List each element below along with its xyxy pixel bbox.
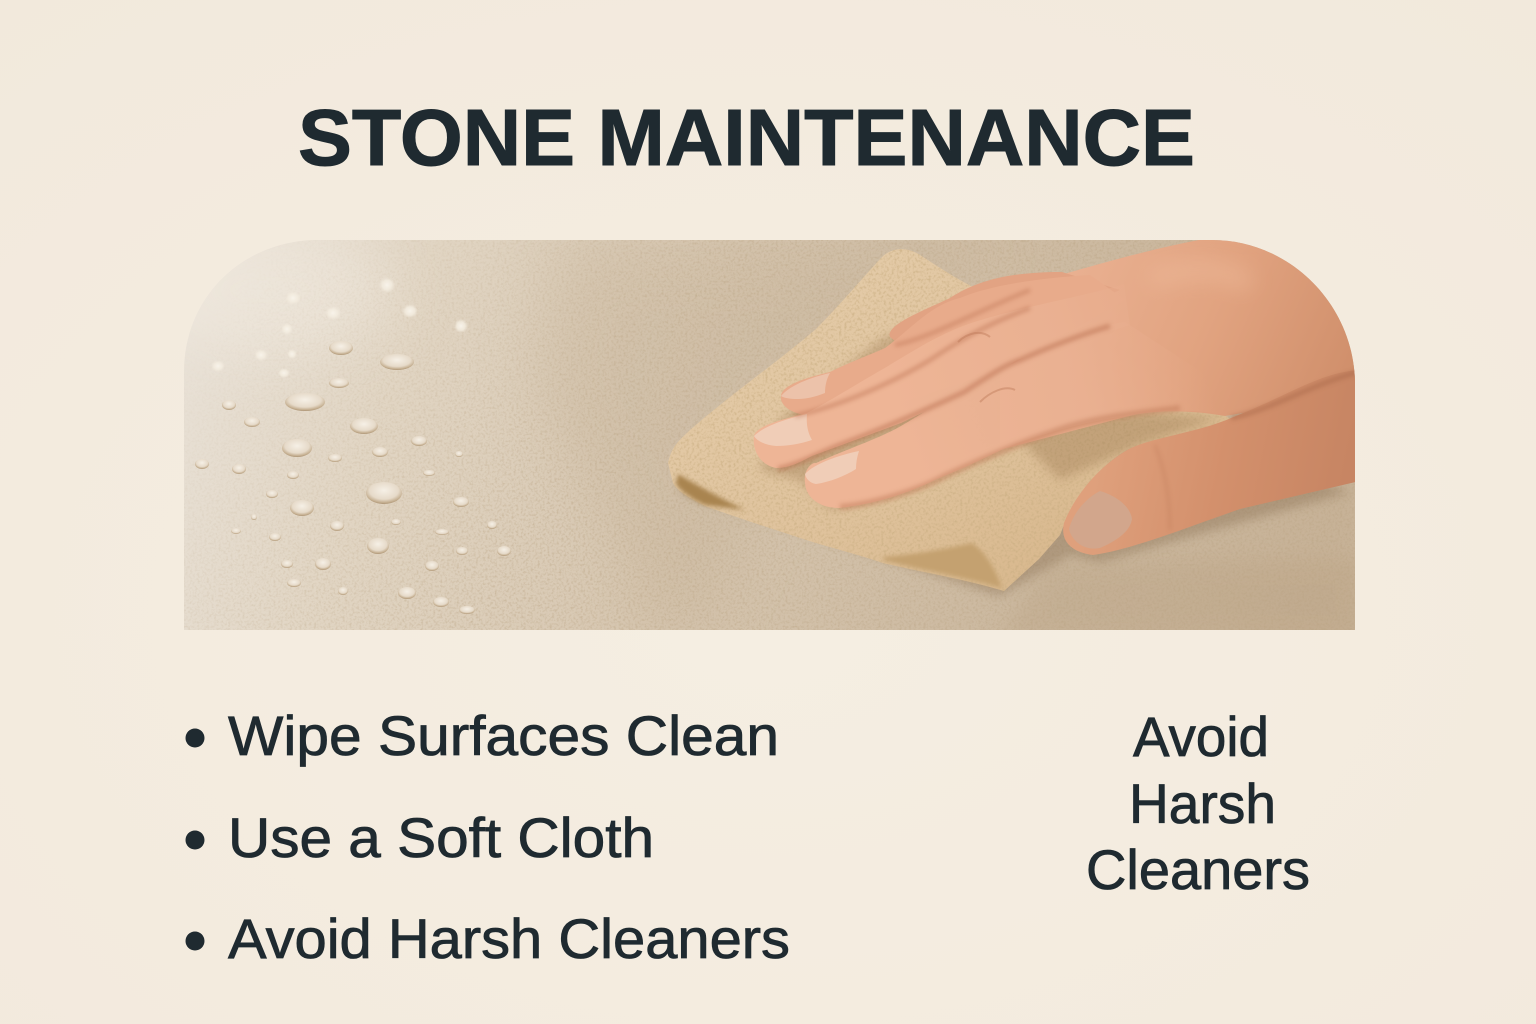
side note: avoid harsh cleaners: Harsh [1129,772,1276,835]
side note: avoid harsh cleaners [1086,705,1310,901]
index finger [804,371,1140,508]
thumb with nail [1063,370,1360,555]
fingernails [754,414,812,446]
middle finger [754,322,997,468]
list item: use a soft cloth: Use a Soft Cloth [228,806,654,869]
list item: wipe surfaces clean: Wipe Surfaces Clean [228,704,779,767]
pinky finger [890,272,1110,340]
list item: avoid harsh cleaners: Avoid Harsh Cleaners [228,907,790,970]
cloth shadow [682,456,1344,598]
fingers [754,271,1260,508]
knuckle creases [958,333,1015,402]
ring finger [781,278,1096,414]
photo: hand wiping wet stone surface with cloth [184,240,1355,630]
stone surface [184,240,1355,630]
infographic canvas [184,109,1355,959]
side note: avoid harsh cleaners: Avoid [1133,705,1269,768]
water droplets [195,277,511,614]
finger shading [778,290,1180,507]
title: STONE MAINTENANCE [298,93,1195,182]
bullet list [186,704,790,970]
hand: back of hand [1000,238,1360,450]
cloth [668,249,1232,591]
side note: avoid harsh cleaners: Cleaners [1086,838,1310,901]
